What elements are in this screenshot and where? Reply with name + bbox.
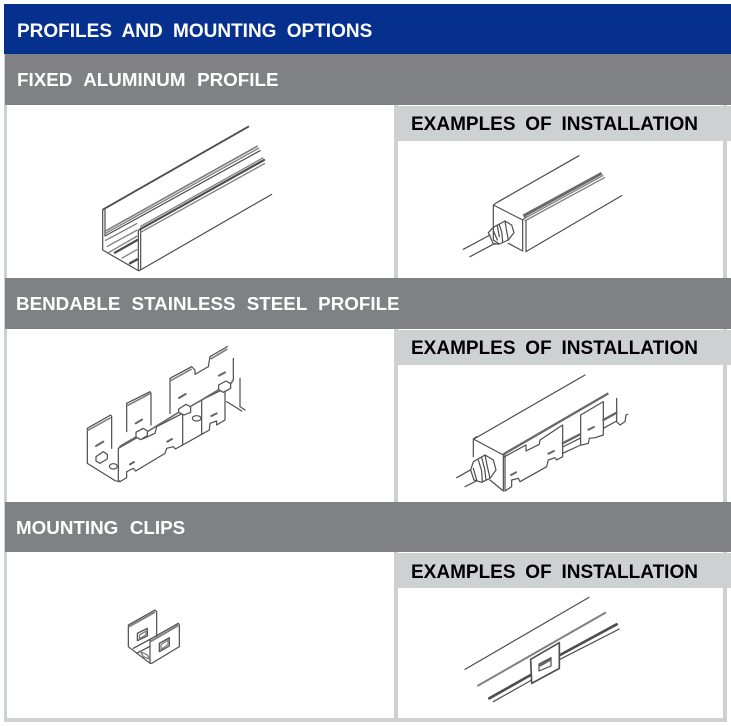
title	[4, 4, 731, 54]
heading: bendable stainless steel profile: BENDABLE STAINLESS STEEL PROFILE	[16, 293, 400, 314]
sub-heading: examples of installation: EXAMPLES OF INSTALLATION	[411, 114, 698, 135]
sub-heading: examples of installation: EXAMPLES OF INSTALLATION	[411, 562, 698, 583]
illustration: mounting clip	[128, 609, 180, 664]
sub-heading: examples of installation	[394, 553, 731, 588]
heading: fixed aluminum profile	[5, 54, 731, 105]
sub-heading: examples of installation	[394, 106, 731, 141]
panel: fixed aluminum profile	[5, 54, 731, 272]
heading: fixed aluminum profile: FIXED ALUMINUM PROFILE	[17, 69, 278, 90]
heading: mounting clips	[5, 502, 731, 552]
title: PROFILES AND MOUNTING OPTIONS	[17, 21, 372, 42]
illustration: stainless steel profile installed	[456, 374, 628, 492]
panel: bendable stainless steel profile	[5, 278, 731, 492]
heading: mounting clips: MOUNTING CLIPS	[16, 517, 185, 538]
illustration: aluminum profile installed	[462, 155, 622, 258]
panel: mounting clips	[5, 502, 731, 702]
sub-heading: examples of installation: EXAMPLES OF INSTALLATION	[411, 338, 698, 359]
illustration: mounting clip installed	[464, 596, 620, 702]
illustration: stainless steel profile	[86, 346, 246, 482]
illustration: aluminum profile	[102, 126, 272, 272]
page frame lines	[4, 54, 6, 722]
sub-heading: examples of installation	[394, 330, 731, 365]
heading: bendable stainless steel profile	[5, 278, 731, 329]
